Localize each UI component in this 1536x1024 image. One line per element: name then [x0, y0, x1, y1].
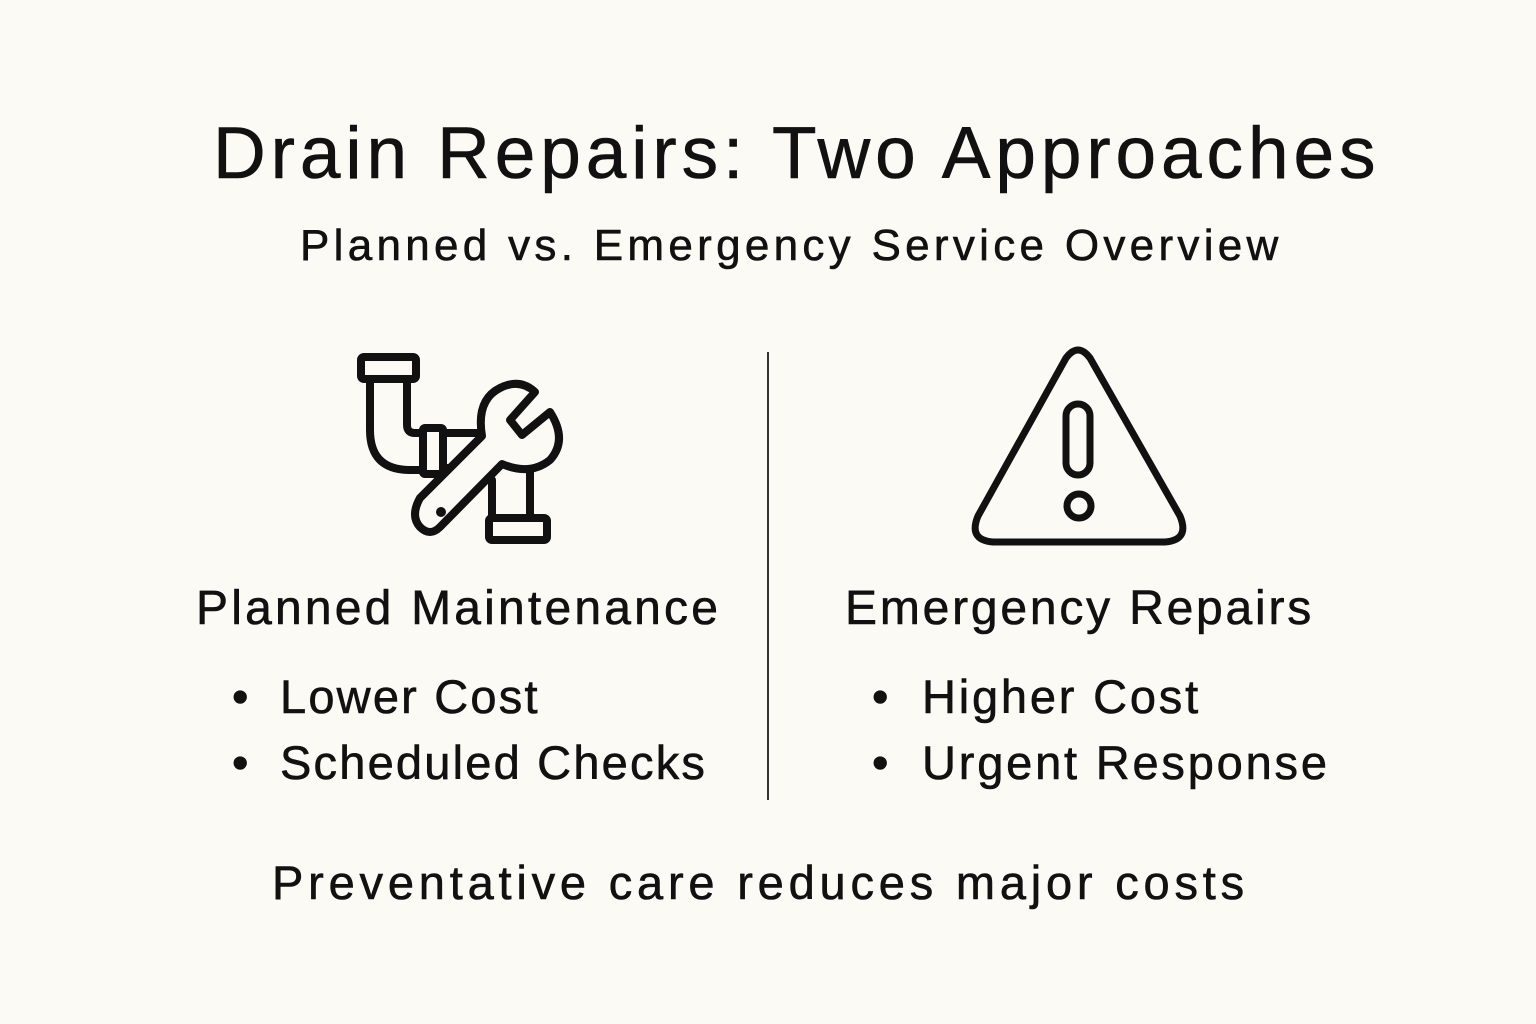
icon: pipe and wrench	[357, 353, 564, 544]
list: emergency: •	[872, 670, 888, 723]
list: planned: Scheduled Checks	[280, 736, 707, 789]
list: planned: •	[232, 736, 248, 789]
heading: planned maintenance: Planned Maintenance	[196, 582, 721, 635]
list: emergency: Urgent Response	[922, 736, 1330, 789]
subtitle: Planned vs. Emergency Service Overview	[300, 221, 1283, 270]
icon: warning triangle	[972, 346, 1186, 546]
divider	[767, 352, 769, 800]
list: emergency: •	[872, 736, 888, 789]
list: planned: •	[232, 670, 248, 723]
list: emergency	[872, 670, 1330, 790]
heading: emergency repairs: Emergency Repairs	[845, 582, 1314, 635]
list: planned: Lower Cost	[280, 670, 540, 723]
list: planned	[232, 670, 707, 789]
footer callout: Preventative care reduces major costs	[272, 856, 1249, 909]
list: emergency: Higher Cost	[922, 670, 1201, 723]
title: Drain Repairs: Two Approaches	[213, 113, 1380, 194]
